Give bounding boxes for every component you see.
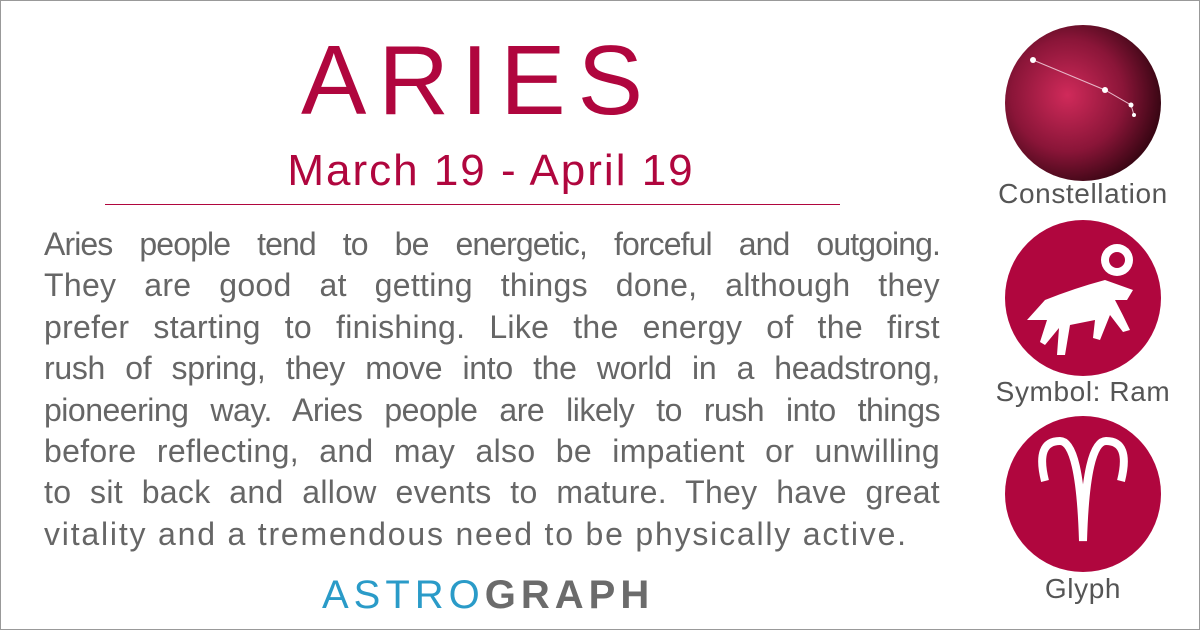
description text: Aries people tend to be energetic, forceful and outgoing.	[44, 226, 940, 262]
icon: ram	[1005, 220, 1161, 376]
description text: pioneering way. Aries people are likely to rush into things	[44, 392, 940, 428]
label: glyph: Glyph	[1045, 573, 1121, 604]
description text: They are good at getting things done, although they	[44, 267, 940, 303]
logo: ASTROGRAPH	[322, 573, 654, 617]
label: symbol: Symbol: Ram	[996, 376, 1170, 407]
description text: rush of spring, they move into the world in a headstrong,	[44, 350, 940, 386]
description text: to sit back and allow events to mature. They have great	[44, 474, 940, 510]
description text: prefer starting to finishing. Like the energy of the first	[44, 309, 940, 345]
description text: before reflecting, and may also be impatient or unwilling	[44, 433, 940, 469]
icon: glyph	[1005, 416, 1161, 572]
title: ARIES	[301, 25, 655, 135]
date range: March 19 - April 19	[287, 146, 695, 195]
description text	[44, 226, 940, 552]
label: constellation: Constellation	[998, 178, 1168, 209]
description text: vitality and a tremendous need to be physically active.	[44, 516, 908, 552]
icon: constellation	[1005, 25, 1161, 181]
